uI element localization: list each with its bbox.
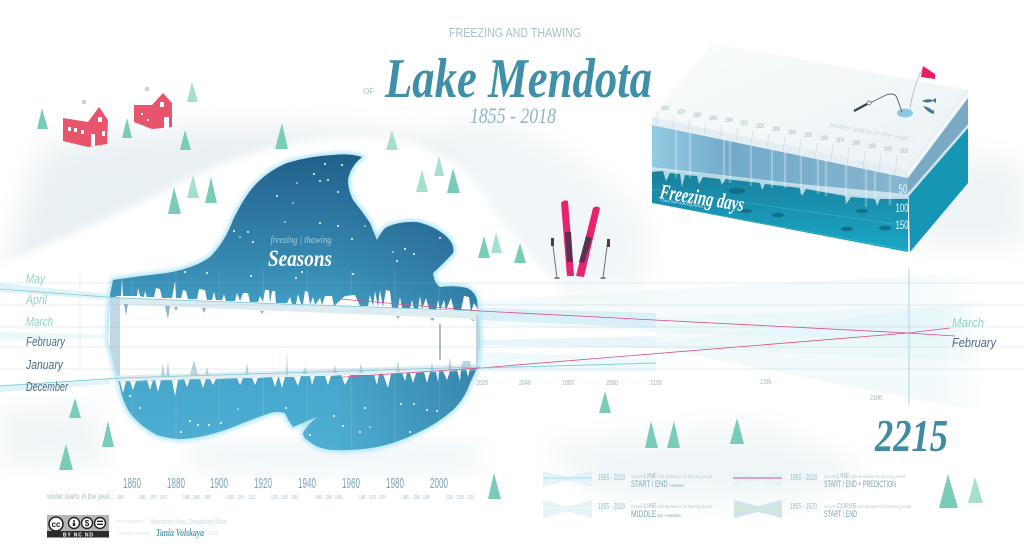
lake heading: freezing | thawing: [270, 234, 332, 246]
legend item: curve: 1855 - 1970: [790, 502, 817, 511]
depth scale: [896, 182, 909, 232]
winter start years row: winter starts in the year :: [46, 492, 113, 501]
months axis labels: February: [26, 334, 66, 349]
forecast fans right of the lake: [480, 268, 985, 412]
winter start years row: 1865: [139, 495, 146, 501]
winter start years row: 1945: [315, 495, 322, 501]
winter start years row: 1910: [237, 495, 244, 501]
cc license badge: [47, 515, 109, 538]
lake heading: Seasons: [268, 246, 332, 271]
credits: Tania Volskaya: [156, 527, 204, 539]
legend item: start end line: 1855 - 2018: [598, 473, 625, 482]
front water: [652, 165, 908, 252]
timeline years: 2000: [430, 475, 448, 492]
slab ticks and years: 1950: [804, 133, 812, 139]
winter start years row: 1870: [150, 495, 157, 501]
ice edge band lower: [105, 364, 480, 383]
white ice season band: [105, 278, 480, 396]
winter start years row: 2010: [457, 495, 464, 501]
legend item: prediction: smooth LINE with deviations for freezing period: [824, 473, 905, 480]
forecast year labels: [476, 379, 882, 402]
skis and poles: [551, 200, 610, 279]
winter start years row: 1875: [160, 495, 167, 501]
timeline years: 1880: [167, 475, 185, 492]
title: Lake Mendota: [384, 48, 652, 110]
front ice chart: [652, 125, 908, 198]
panel: ice block freezing days: 1 bars from freezing period 1: [660, 197, 707, 209]
winter start years row: 1965: [359, 495, 366, 501]
houses: [63, 87, 172, 147]
title: FREEZING AND THAWING: [449, 25, 581, 40]
months axis labels: December: [26, 379, 68, 394]
winter start years row: [46, 492, 474, 501]
block heading: Freezing days: [658, 179, 746, 216]
winter start years row: 1915: [248, 495, 255, 501]
trend lines and month grid: [0, 270, 1024, 392]
forecast year labels: 2190: [870, 395, 882, 402]
panel: ice block freezing days: [652, 43, 968, 252]
prediction year 2215: 2215: [874, 410, 948, 461]
slab ticks and years: 1880: [693, 113, 701, 119]
legend item: start end line: smooth LINE with deviations for freezing period: [631, 473, 712, 480]
icicle bars: [676, 128, 890, 207]
legend item: prediction: [733, 470, 905, 489]
months axis labels: February: [952, 335, 997, 350]
legend: [543, 470, 911, 519]
slab ticks and years: 1930: [772, 127, 780, 133]
fish shadows: [729, 188, 891, 231]
forecast year labels: 2040: [519, 380, 531, 387]
months axis labels: April: [25, 292, 48, 307]
winter start years row: 1925: [271, 495, 278, 501]
title: [363, 25, 652, 128]
legend item: prediction: 1950 - 2018: [790, 473, 817, 482]
timeline years: [123, 475, 448, 492]
legend item: middle day: smooth LINE with deviations for freezing period: [631, 503, 712, 510]
trees: [37, 82, 983, 508]
slab ticks and years: 1910: [740, 121, 748, 127]
winter start years row: 1905: [227, 495, 234, 501]
winter start years row: 1935: [291, 495, 298, 501]
slab ticks and years: 1960: [820, 136, 828, 142]
lake heading: [268, 234, 332, 271]
forecast year labels: 2150: [760, 379, 771, 386]
cc license badge: cc: [52, 520, 61, 529]
winter start years row: 1885: [183, 495, 190, 501]
stars: [129, 163, 441, 436]
slab ticks and years: 1870: [677, 110, 685, 116]
credits: CONCEPT, DESIGN :: [118, 531, 152, 536]
timeline years: 1940: [298, 475, 316, 492]
credits: DATA SOURCE :: [117, 519, 145, 524]
depth scale: 50: [898, 182, 908, 196]
timeline years: 1860: [123, 475, 141, 492]
ice block top face: [652, 43, 968, 170]
legend item: middle day: 1855 - 2018: [598, 502, 625, 511]
title: OF: [363, 87, 374, 96]
slab ticks and years: 2010: [900, 149, 908, 155]
months axis labels: May: [26, 271, 46, 286]
ice fishing hole rod flag fish: [854, 66, 936, 118]
slab ticks and years: 2000: [884, 147, 892, 153]
legend item: curve: [734, 500, 911, 519]
winter start years row: 1985: [402, 495, 409, 501]
legend item: start end line: [543, 471, 712, 489]
cc license badge: $: [85, 519, 90, 528]
months axis labels: March: [952, 315, 984, 330]
legend item: prediction: START / END + PREDICTION: [824, 479, 896, 489]
legend item: middle day: [543, 500, 712, 519]
winter start years row: 1955: [335, 495, 342, 501]
lake water: [100, 150, 490, 455]
grey edge strips: [110, 297, 120, 376]
winter start years row: 2015: [467, 495, 474, 501]
forecast year labels: 2100: [650, 380, 662, 387]
months axis labels: January: [25, 357, 64, 372]
ice edge band upper: [105, 297, 480, 319]
timeline years: 1980: [386, 475, 404, 492]
winter start years row: 1890: [193, 495, 200, 501]
panel: lake seasons: [100, 150, 490, 455]
legend item: curve: smooth CURVE with deviations for freezing period: [824, 503, 911, 510]
credits: 2018: [208, 531, 218, 537]
legend item: middle day: MIDDLE day + extension: [631, 509, 681, 519]
winter start years row: 1895: [204, 495, 211, 501]
slab ticks and years: 1970: [836, 138, 844, 144]
slab ticks and years: 1890: [709, 116, 717, 122]
winter start years row: 1970: [369, 495, 376, 501]
title: 1855 - 2018: [470, 103, 556, 128]
timeline years: 1900: [210, 475, 228, 492]
slab ticks and years: 1980: [852, 141, 860, 147]
credits: Wisconsin State Climatology Office: [151, 519, 227, 526]
timeline years: 1960: [342, 475, 360, 492]
winter start years row: 1855: [117, 495, 124, 501]
timeline years: 1920: [254, 475, 272, 492]
legend item: start end line: START / END + extension: [631, 479, 684, 489]
slab ticks and years: [661, 106, 908, 155]
slab ticks and years: 1990: [868, 144, 876, 150]
slab ticks and years: 1940: [788, 130, 796, 136]
front slab: [652, 117, 908, 178]
months axis labels: March: [26, 314, 53, 329]
winter start years row: 1990: [413, 495, 420, 501]
depth scale: 150: [896, 218, 909, 232]
winter start years row: 1975: [379, 495, 386, 501]
axis labels on top face: winter starts in the year :: [830, 122, 914, 144]
slab ticks and years: 1860: [661, 106, 669, 112]
forecast year labels: 2020: [476, 380, 488, 387]
legend item: curve: START / END: [824, 509, 857, 519]
cc license badge: BY NC ND: [63, 532, 93, 538]
months axis labels: [25, 271, 997, 394]
depth scale: 100: [896, 201, 909, 215]
winter start years row: 1950: [325, 495, 332, 501]
forecast year labels: 2080: [606, 380, 618, 387]
winter start years row: 1995: [423, 495, 430, 501]
winter start years row: 1930: [281, 495, 288, 501]
forecast year labels: 2060: [562, 380, 574, 387]
slab ticks and years: 1900: [725, 118, 733, 124]
lake glow outline: [108, 154, 480, 450]
blue deviations from ice edge: [124, 304, 476, 321]
credits: [117, 519, 227, 539]
right face: [908, 90, 968, 252]
slab ticks and years: 1920: [756, 124, 764, 130]
winter start years row: 2005: [446, 495, 453, 501]
